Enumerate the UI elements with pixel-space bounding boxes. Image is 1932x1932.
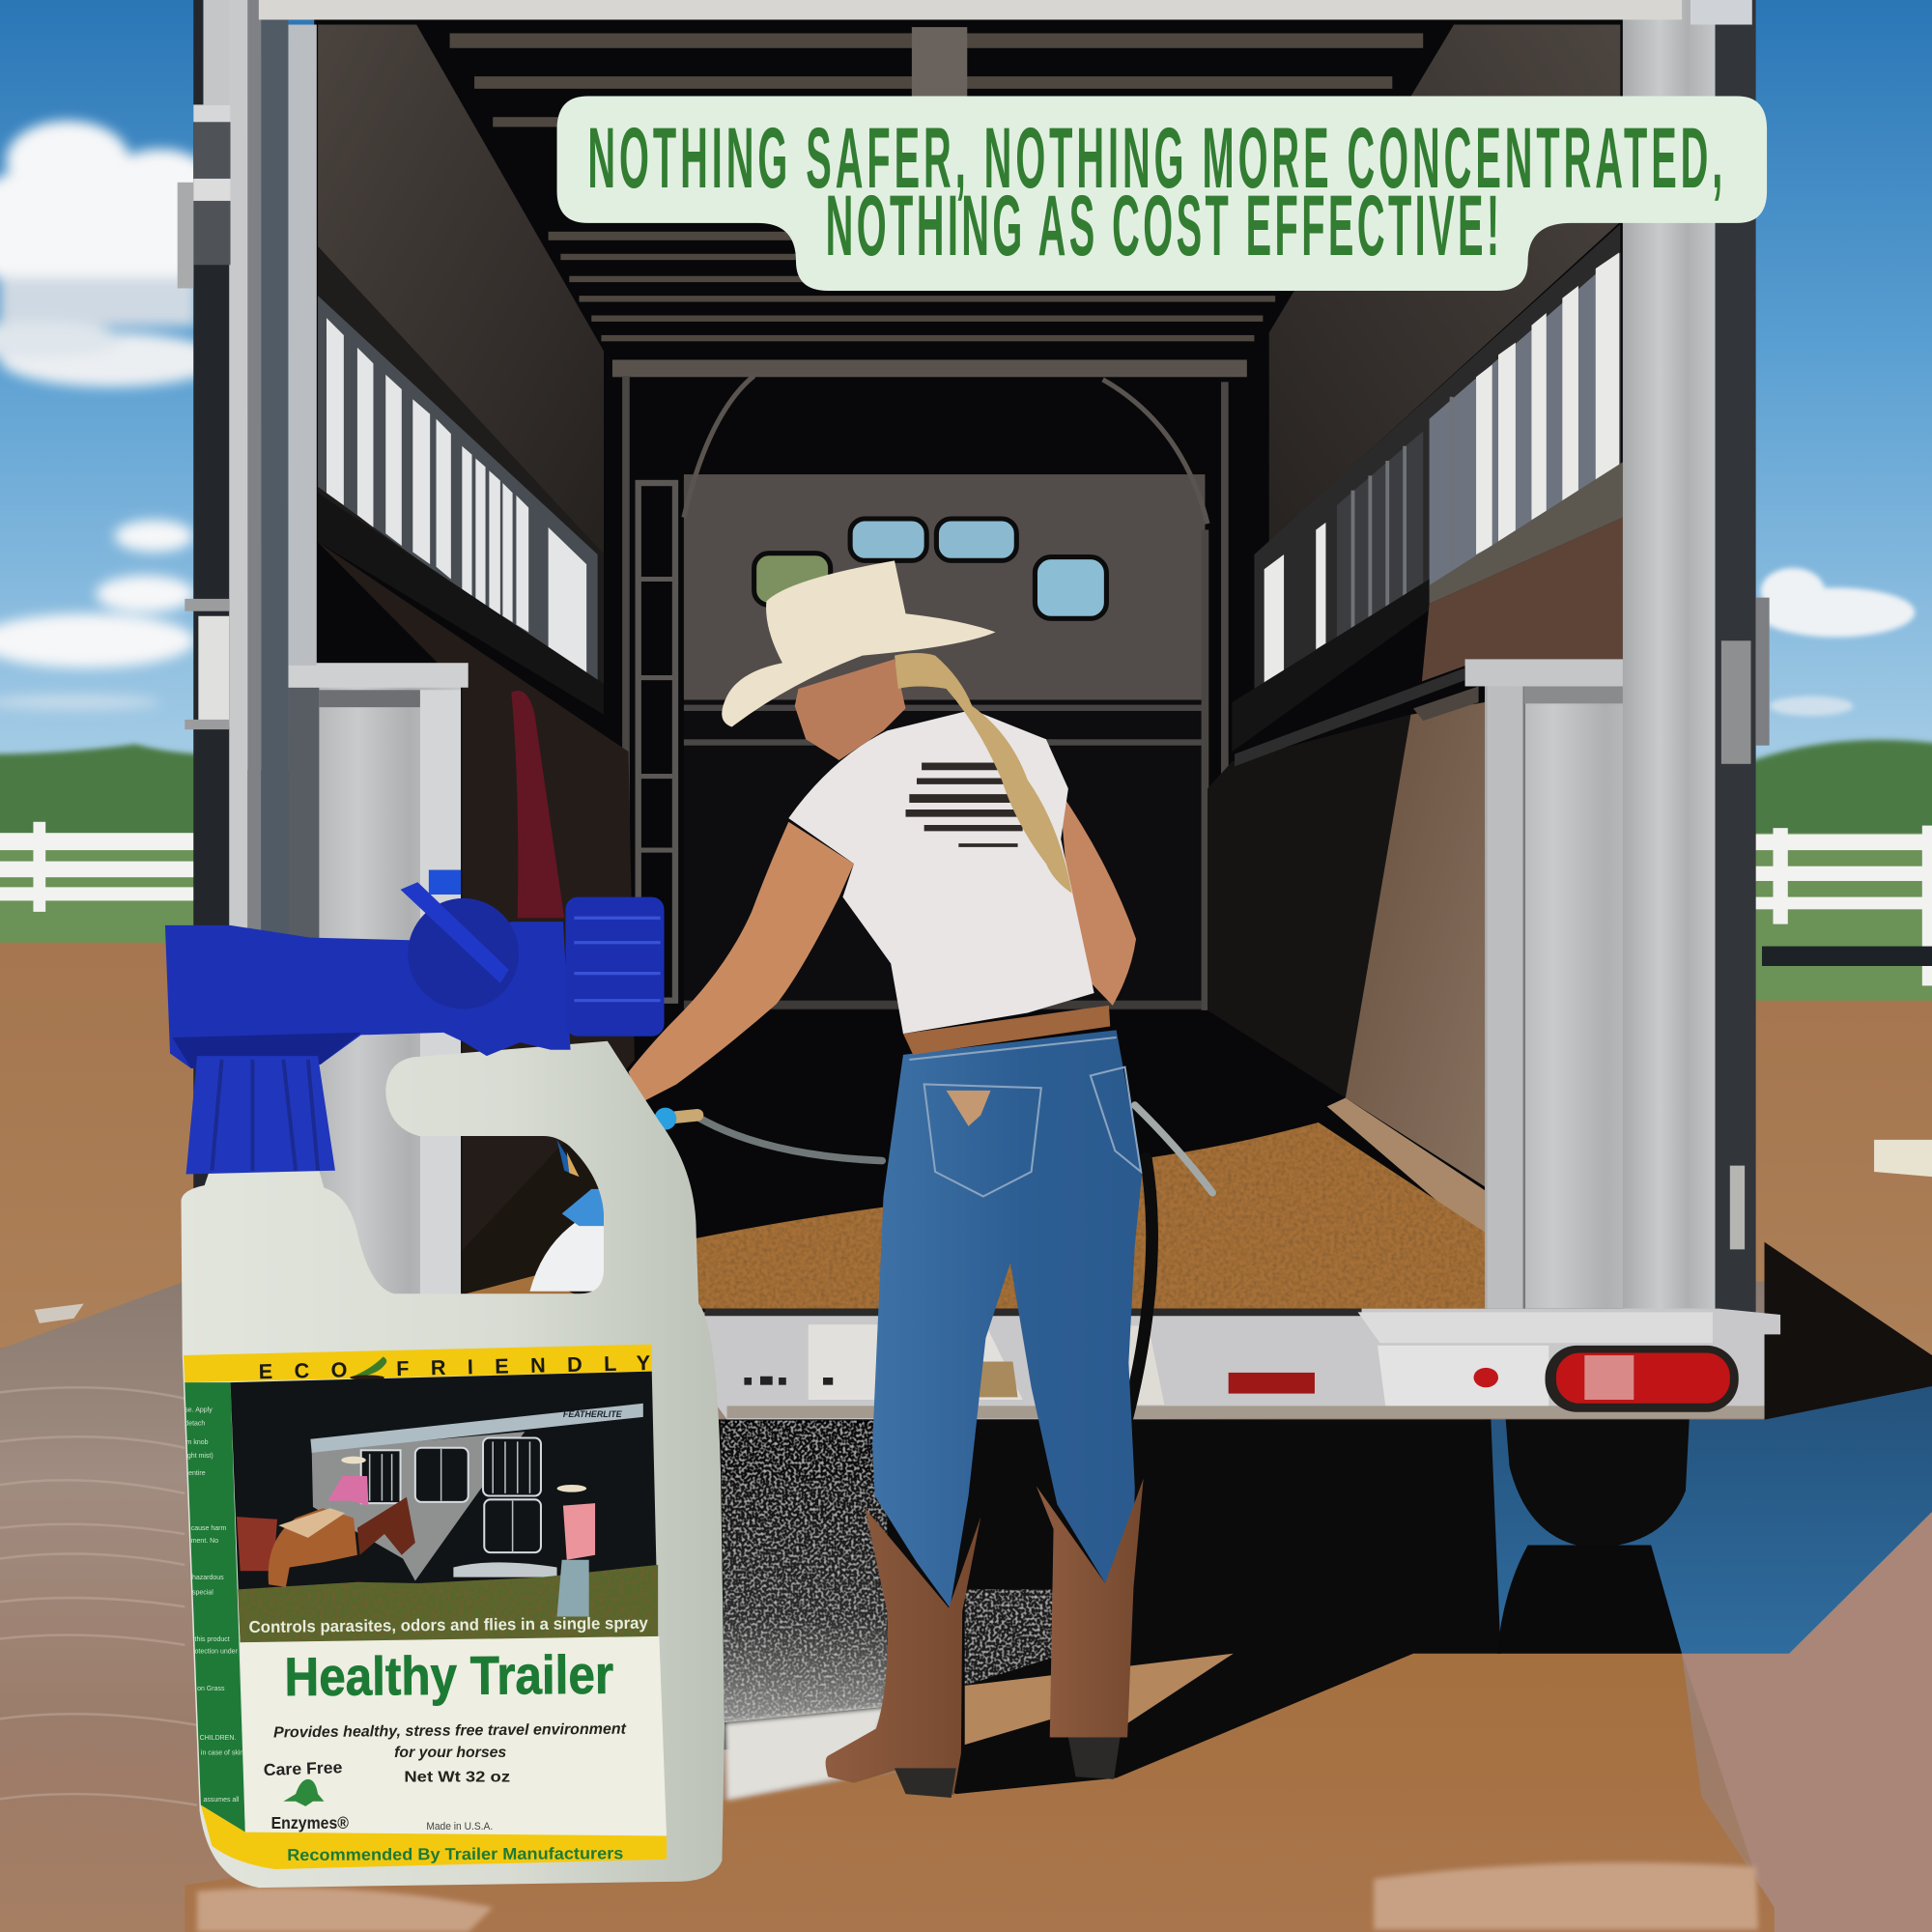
side panel fine print: ment. No xyxy=(191,1538,218,1545)
headline text xyxy=(587,108,1722,273)
photo window bars xyxy=(370,1441,529,1552)
t-shirt xyxy=(788,710,1094,1034)
water ripples xyxy=(0,1387,197,1805)
product description: for your horses xyxy=(394,1745,506,1761)
right silver panel xyxy=(1235,659,1672,1309)
side panel fine print: hazardous xyxy=(192,1575,224,1581)
far arm xyxy=(1060,791,1136,1006)
near arm xyxy=(629,822,854,1103)
light water patches xyxy=(197,1862,1758,1932)
white foam xyxy=(724,1707,887,1801)
side panel fine print: otection under xyxy=(195,1649,239,1656)
side panel fine print: special xyxy=(192,1590,213,1597)
side panel fine print: assumes all xyxy=(203,1797,240,1804)
side panel fine print: on Grass xyxy=(197,1686,225,1692)
speckled wet floor xyxy=(721,1421,887,1722)
side panel fine print: this product xyxy=(195,1636,230,1643)
side panel fine print xyxy=(185,1407,243,1804)
shavings bedding xyxy=(696,1122,1485,1309)
eco friendly text: ECO FRIENDLY xyxy=(258,1350,651,1383)
boot left xyxy=(826,1508,980,1795)
sill band xyxy=(1430,462,1623,604)
back panel with windows xyxy=(626,376,1225,1010)
woman xyxy=(629,560,1144,1798)
jeans pockets xyxy=(909,1037,1141,1197)
ceiling slats xyxy=(450,27,1423,377)
product jug xyxy=(165,870,724,1888)
product description xyxy=(273,1721,627,1785)
brown reflection xyxy=(185,1654,1775,1932)
icon: frog xyxy=(283,1779,324,1806)
care free enzymes logo: Care Free xyxy=(263,1757,343,1779)
product description: Net Wt 32 oz xyxy=(404,1769,510,1785)
hanging strap xyxy=(511,691,564,918)
brown wall panel xyxy=(1422,518,1623,681)
side panel fine print: entire xyxy=(188,1470,206,1477)
right dark lower wall xyxy=(1208,715,1410,1097)
trailer xyxy=(178,0,1780,1654)
right window strip xyxy=(1233,224,1620,752)
trailer interior back xyxy=(314,18,1627,1312)
label tagline: Controls parasites, odors and flies in a single spray xyxy=(248,1613,648,1636)
clouds left xyxy=(0,121,241,710)
label cream panel xyxy=(241,1636,667,1837)
panel shape xyxy=(557,96,1767,291)
photo trailer fender xyxy=(453,1562,557,1577)
eco leaf icon xyxy=(350,1356,386,1380)
care free enzymes logo xyxy=(263,1757,349,1833)
fence left xyxy=(0,822,197,912)
dark floor near door xyxy=(462,1109,702,1296)
photo horses xyxy=(237,1497,415,1587)
face xyxy=(795,659,906,760)
top header bar xyxy=(259,0,1682,19)
recommended text: Recommended By Trailer Manufacturers xyxy=(287,1843,623,1864)
fence right xyxy=(1756,826,1932,1177)
side slats xyxy=(1353,397,1452,636)
label photo xyxy=(231,1372,658,1642)
sprayer cap xyxy=(186,1056,335,1175)
clouds right xyxy=(1757,568,1915,716)
left window strip xyxy=(318,246,604,715)
headline text: NOTHING SAFER, NOTHING MORE CONCENTRATED, xyxy=(587,108,1722,206)
headline speech panel xyxy=(557,96,1767,291)
ponytail xyxy=(895,653,1072,894)
sprayer arm xyxy=(165,922,571,1068)
side panel fine print: CHILDREN. xyxy=(200,1735,236,1742)
label yellow top band xyxy=(184,1345,652,1382)
sprayer knob xyxy=(565,897,665,1037)
left silver panel xyxy=(288,663,469,1303)
wheel xyxy=(1506,1419,1690,1548)
side panel fine print: se. Apply xyxy=(185,1407,213,1414)
left upper wall xyxy=(318,25,604,554)
selector dial xyxy=(401,870,519,1009)
photo grass xyxy=(238,1565,658,1642)
label yellow bottom band xyxy=(201,1805,667,1869)
product name: Healthy Trailer xyxy=(284,1644,613,1707)
right upper wall xyxy=(1269,25,1620,542)
tail light xyxy=(1545,1346,1739,1412)
boot heels xyxy=(895,1737,1120,1798)
pink water right xyxy=(1682,1512,1932,1932)
side panel fine print: cause harm xyxy=(191,1525,226,1532)
pocket patch xyxy=(947,1091,991,1126)
right door post xyxy=(1623,0,1770,1312)
side panel fine print: detach xyxy=(185,1421,205,1428)
rear bumper xyxy=(705,1309,1780,1419)
side panel fine print: ght mist) xyxy=(187,1453,213,1460)
product description: Provides healthy, stress free travel environment xyxy=(273,1721,627,1741)
boot right xyxy=(1037,1479,1144,1737)
background: sky xyxy=(0,0,1932,770)
shirt graphic xyxy=(906,766,1025,845)
photo trailer roof xyxy=(310,1404,643,1453)
dirt shadow right xyxy=(1765,1242,1932,1423)
label green side panel xyxy=(185,1382,245,1833)
left door post xyxy=(178,0,317,1202)
hose nozzle xyxy=(654,1108,676,1130)
wood ramp panel xyxy=(1346,702,1485,1186)
grass xyxy=(0,833,1932,1006)
spray bottle in hand xyxy=(529,1140,607,1292)
small bedding patch xyxy=(466,1275,579,1296)
care free enzymes logo: Enzymes® xyxy=(271,1813,349,1833)
shadow under trailer xyxy=(716,1419,1501,1794)
photo trailer body xyxy=(312,1432,525,1580)
jeans xyxy=(872,1030,1142,1608)
left lower wall xyxy=(318,542,635,1251)
speckle between legs xyxy=(965,1589,1054,1686)
side panel fine print: in case of skin xyxy=(201,1749,243,1756)
foam on the dirt edge xyxy=(35,1303,84,1323)
arm lower shadow xyxy=(173,1033,361,1068)
water puddle xyxy=(0,1282,1932,1932)
photo rider xyxy=(327,1457,368,1506)
cowboy hat xyxy=(722,560,996,727)
photo man xyxy=(557,1485,595,1616)
jug body xyxy=(182,1041,724,1888)
side panel fine print: m knob xyxy=(186,1439,209,1446)
made in usa: Made in U.S.A. xyxy=(426,1821,493,1833)
headline text: NOTHING AS COST EFFECTIVE! xyxy=(826,177,1499,273)
featherlite mark: FEATHERLITE xyxy=(563,1409,623,1419)
blue water reflection xyxy=(1485,1386,1932,1654)
photo trailer windows xyxy=(361,1438,541,1552)
tree line xyxy=(0,740,1932,850)
dirt ground xyxy=(0,943,1932,1355)
hose behind woman xyxy=(661,1105,1212,1417)
sunlit patch xyxy=(965,1654,1234,1745)
belt xyxy=(903,1006,1110,1055)
kick plate xyxy=(1327,1097,1485,1242)
wheel reflection xyxy=(1497,1545,1682,1654)
